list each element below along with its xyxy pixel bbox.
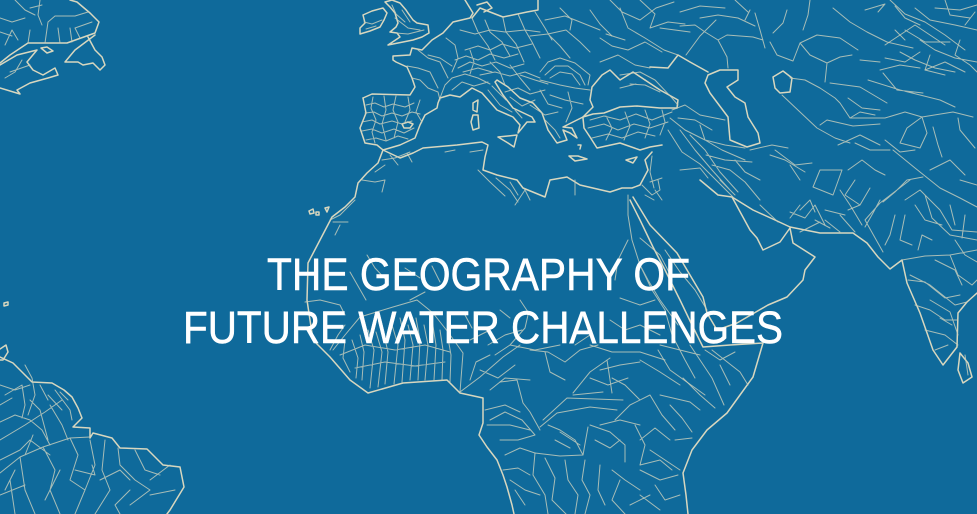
- rivers: Indian peninsula: [902, 235, 977, 375]
- rivers: Pakistan and northern India: [800, 150, 977, 252]
- title line 2: FUTURE WATER CHALLENGES: [183, 302, 783, 353]
- coast: Black Sea and Anatolia: [583, 55, 708, 150]
- coast: Caspian Sea: [705, 70, 760, 147]
- coast: Ireland: [360, 8, 387, 34]
- coast: Iran, Pakistan and India: [732, 197, 977, 365]
- coast: Arabian peninsula: [633, 180, 815, 330]
- coast: eastern Canada and Newfoundland: [0, 0, 105, 94]
- coast: Atlantic Europe: [363, 0, 538, 98]
- rivers: British Isles and Iberia: [362, 5, 424, 143]
- coast: Maghreb and Libya: [307, 142, 652, 514]
- rivers: Central Asia: [770, 0, 975, 157]
- rivers: France and central Europe: [407, 8, 612, 100]
- coast: Aral Sea: [773, 71, 792, 93]
- coast: Mediterranean islands: [402, 100, 637, 163]
- rivers: West Africa and Niger basin: [333, 300, 598, 392]
- coast: Iberia and northern Mediterranean: [360, 70, 645, 150]
- title: [183, 249, 783, 353]
- coast: Atlantic islands: [4, 207, 329, 306]
- rivers: eastern Canada: [0, 0, 92, 78]
- rivers: southern Central Africa: [503, 448, 680, 514]
- rivers: Russia and Ukraine: [600, 0, 765, 105]
- title line 1: THE GEOGRAPHY OF: [267, 249, 690, 300]
- coast: Red Sea west and East Africa: [630, 200, 763, 514]
- rivers: Siberia and Mongolia: [885, 0, 977, 75]
- coast: Great Britain: [385, 0, 429, 45]
- rivers: Northwest Africa: [305, 150, 575, 350]
- coast: Sri Lanka: [958, 353, 972, 383]
- rivers: South America: [0, 365, 175, 514]
- rivers: Carpathians and Balkans: [488, 58, 590, 138]
- coast: South America: [0, 345, 184, 514]
- rivers: Nile and Sudan: [590, 195, 748, 408]
- rivers: Anatolia and the Levant: [588, 110, 672, 200]
- rivers: Congo basin: [485, 350, 705, 470]
- rivers: Mesopotamia and Iran: [668, 105, 862, 225]
